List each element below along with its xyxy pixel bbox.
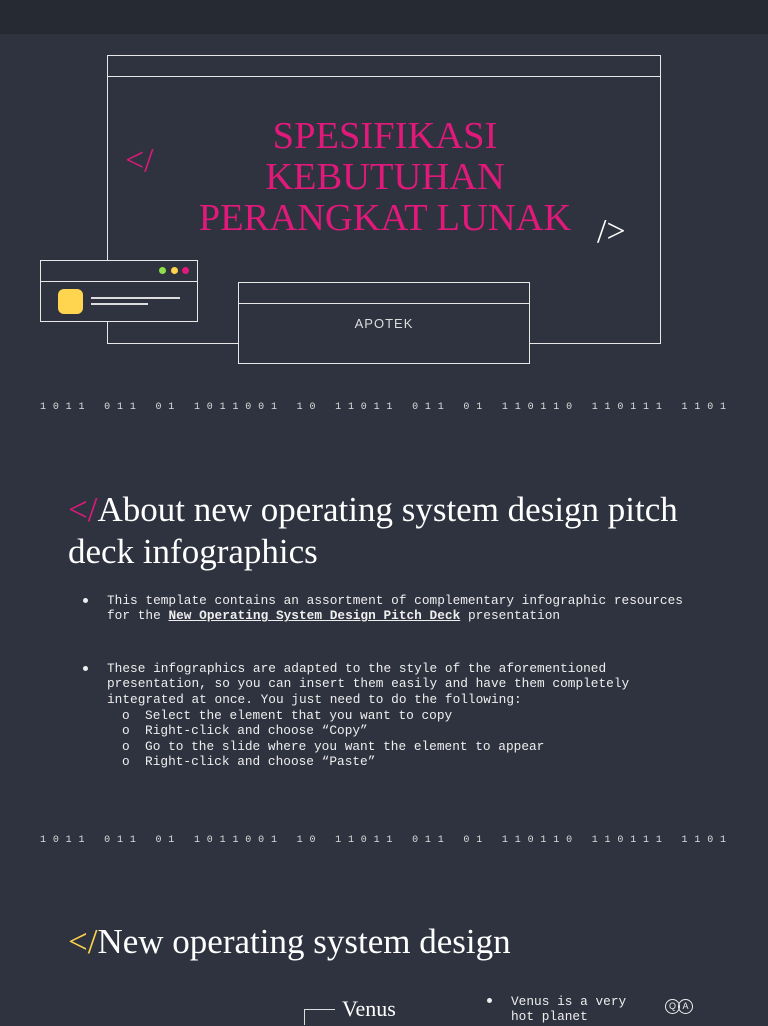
- icon: QA: [665, 999, 693, 1014]
- bullet 2: These infographics are adapted to the style of the aforementioned presentation, so you can insert them easily and have them completely integrated at once. You just need to do the following:: [107, 661, 629, 707]
- icon: QA: Q: [669, 1001, 676, 1011]
- title: SPESIFIKASI: [273, 115, 497, 157]
- top bar: [0, 0, 768, 34]
- venus label: [304, 996, 396, 1025]
- bullet 1: This template contains an assortment of complementary infographic resources for the New Operating System Design Pitch Deck presentation: [107, 593, 683, 623]
- icon: QA: A: [682, 1001, 688, 1011]
- code tag left: </: [125, 142, 154, 179]
- main window: [107, 55, 661, 344]
- heading: new os design: </New operating system design: [68, 922, 511, 961]
- title: PERANGKAT LUNAK: [199, 197, 571, 239]
- sub list: o Select the element that you want to copy o Right-click and choose “Copy” o Go to the slide where you want the element to appear o Right-click and choose “Paste”: [122, 708, 544, 769]
- apotek window: [238, 282, 530, 364]
- heading: about: </About new operating system design pitch deck infographics: [68, 490, 678, 571]
- venus text: Venus is a very hot planet: [511, 994, 626, 1024]
- code tag right: />: [597, 213, 626, 250]
- bullet 2: [83, 661, 629, 769]
- title: KEBUTUHAN: [265, 156, 505, 198]
- title: [199, 115, 571, 239]
- binary strip 2: 1011 011 01 1011001 10 11011 011 01 110110 110111 1101: [40, 835, 733, 846]
- binary strip 1: 1011 011 01 1011001 10 11011 011 01 110110 110111 1101: [40, 402, 733, 413]
- venus label: Venus: [342, 996, 396, 1021]
- small window: [40, 260, 198, 322]
- apotek window: APOTEK: [355, 316, 413, 331]
